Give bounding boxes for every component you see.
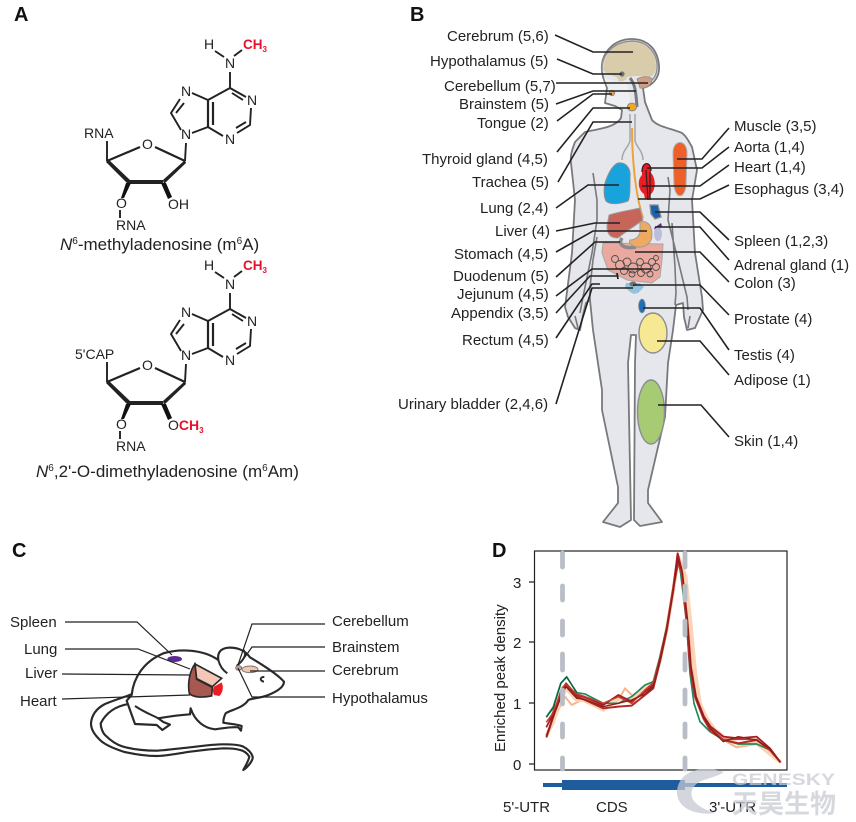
label: Cerebrum (mouse): Cerebrum (332, 662, 399, 679)
label: Liver (mouse): Liver (25, 665, 58, 682)
mouse cerebellum (236, 666, 242, 670)
caption: N6,2'-O-dimethyladenosine: 6 (48, 463, 54, 474)
watermark: Genesky logo and text (677, 769, 836, 819)
gene region label: 5'-UTR: 5'-UTR (503, 799, 550, 816)
label: Thyroid gland (422, 108, 630, 168)
molecule: N6-methyladenosine structure: RNA (116, 217, 146, 233)
intestine (602, 243, 663, 283)
liver (607, 208, 643, 238)
molecule: N6,2'-O-dimethyladenosine structure: N (225, 352, 235, 368)
mouse liver (189, 664, 212, 697)
chart: enriched peak density (492, 551, 787, 774)
label: Stomach (454, 231, 647, 263)
molecule: N6,2'-O-dimethyladenosine structure: OCH (168, 417, 199, 433)
label: Heart: Heart (1,4) (734, 159, 806, 176)
label: Duodenum (453, 242, 620, 285)
label: Lung (mouse): Lung (24, 641, 57, 658)
hypothalamus (619, 71, 625, 77)
label: Urinary bladder: Urinary bladder (2,4,6) (398, 396, 548, 413)
label: Stomach: Stomach (4,5) (454, 246, 548, 263)
arm and torso contours (575, 173, 690, 328)
mouse spleen (167, 656, 182, 662)
watermark text Chinese: 天昊生物 (732, 789, 836, 819)
label: Spleen (mouse) (10, 614, 172, 655)
label: Cerebrum (447, 28, 633, 52)
aorta (642, 164, 651, 200)
lung (604, 163, 630, 204)
label: Testis (643, 308, 795, 364)
human body diagram (565, 39, 703, 527)
molecule: N6-methyladenosine structure (84, 36, 268, 233)
label: Spleen: Spleen (1,2,3) (734, 233, 828, 250)
molecule: N6-methyladenosine structure: N (181, 83, 191, 99)
caption: N6,2'-O-dimethyladenosine: N (36, 462, 49, 481)
label: Aorta: Aorta (1,4) (734, 139, 805, 156)
brainstem (630, 78, 637, 107)
esophagus (632, 128, 643, 218)
label: Rectum: Rectum (4,5) (462, 332, 549, 349)
mouse cerebrum (242, 666, 258, 673)
y axis ticks and numbers: 2 (513, 635, 521, 652)
molecule: N6-methyladenosine structure: H (204, 36, 214, 52)
label: Cerebellum (mouse): Cerebellum (332, 613, 409, 630)
mouse tail (91, 694, 253, 770)
molecule: N6-methyladenosine structure: CH (243, 37, 262, 52)
molecule: N6-methyladenosine structure: RNA (84, 125, 114, 141)
label: Prostate (633, 285, 812, 328)
muscle (673, 142, 687, 196)
label: Hypothalamus (mouse) (238, 668, 428, 707)
spleen (650, 205, 661, 219)
molecule: N6,2'-O-dimethyladenosine structure: 3 (199, 426, 204, 435)
caption: N6,2'-O-dimethyladenosine: Am) (268, 462, 299, 481)
adrenal gland (654, 223, 662, 230)
molecule: N6,2'-O-dimethyladenosine structure: N (181, 304, 191, 320)
molecule: N6-methyladenosine structure: N (247, 92, 257, 108)
panel letter A: A (14, 4, 28, 26)
y axis ticks and numbers (513, 575, 534, 774)
mouse heart (213, 682, 223, 696)
label: Aorta (647, 139, 805, 168)
caption: N6-methyladenosine: -methyladenosine (m (78, 235, 237, 254)
label: Brainstem (459, 91, 636, 113)
cerebrum (603, 41, 656, 81)
prostate (630, 282, 636, 286)
caption: N6-methyladenosine: 6 (237, 236, 243, 247)
y axis ticks and numbers: 0 (513, 757, 521, 774)
skin (638, 380, 664, 444)
label: Skin (658, 405, 798, 450)
label: Brainstem: Brainstem (5) (459, 96, 549, 113)
molecule: N6-methyladenosine structure: O (116, 195, 127, 211)
label: Liver: Liver (4) (495, 223, 550, 240)
curves (547, 553, 780, 762)
label: Urinary bladder (398, 288, 633, 413)
molecule: N6,2'-O-dimethyladenosine structure: H (204, 257, 214, 273)
label: Tongue: Tongue (2) (477, 115, 549, 132)
label: Duodenum: Duodenum (5) (453, 268, 549, 285)
stomach (629, 222, 652, 247)
molecule: N6,2'-O-dimethyladenosine structure: RNA (116, 438, 146, 454)
label: Heart (642, 159, 806, 186)
appendix (617, 273, 618, 279)
label: Cerebrum: Cerebrum (5,6) (447, 28, 549, 45)
molecule: N6,2'-O-dimethyladenosine structure: 3 (262, 266, 268, 275)
label: Trachea (472, 122, 632, 191)
label: Rectum (462, 284, 600, 349)
panel letter C: C (12, 540, 26, 562)
label: Liver (495, 223, 620, 240)
label: Adrenal gland: Adrenal gland (1) (734, 257, 849, 274)
dashed boundary lines (562, 553, 685, 769)
y axis ticks and numbers: 1 (513, 696, 521, 713)
label: Brainstem (mouse): Brainstem (332, 639, 400, 656)
label: Hypothalamus (430, 53, 622, 74)
molecule: N6,2'-O-dimethyladenosine structure: O (142, 357, 153, 373)
caption: N6-methyladenosine: A) (242, 235, 259, 254)
label: Thyroid gland: Thyroid gland (4,5) (422, 151, 548, 168)
watermark text GENESKY: GENESKY (732, 770, 836, 789)
caption: N6,2'-O-dimethyladenosine: ,2'-O-dimethyladenosine (m (54, 462, 262, 481)
label: Jejunum: Jejunum (4,5) (457, 286, 549, 303)
caption: N6-methyladenosine: 6 (72, 236, 78, 247)
label: Lung (mouse) (24, 641, 190, 669)
label: Spleen (mouse): Spleen (10, 614, 57, 631)
molecule: N6,2'-O-dimethyladenosine structure: O (116, 416, 127, 432)
molecule: N6-methyladenosine structure: OH (168, 196, 189, 212)
hind leg and ear folds (135, 650, 245, 718)
body silhouette (565, 39, 703, 527)
label: Skin: Skin (1,4) (734, 433, 798, 450)
label: Adipose (657, 341, 811, 389)
skull ring (602, 41, 657, 80)
tongue (609, 90, 615, 96)
gene region label: CDS: CDS (596, 799, 628, 816)
molecule: N6,2'-O-dimethyladenosine structure: N (247, 313, 257, 329)
gene region label: 3'-UTR: 3'-UTR (709, 799, 756, 816)
heart (639, 164, 655, 199)
label: Adrenal gland (655, 227, 849, 274)
panel letter B: B (410, 4, 424, 26)
label: Spleen (655, 212, 828, 250)
testis (639, 299, 645, 313)
molecule: N6,2'-O-dimethyladenosine structure: N (225, 276, 235, 292)
label: Esophagus (638, 181, 844, 199)
molecule: N6,2'-O-dimethyladenosine structure (75, 257, 268, 454)
gene model bar (543, 780, 787, 790)
duodenum (621, 238, 636, 248)
label: Heart (mouse): Heart (20, 693, 58, 710)
label: Testis: Testis (4) (734, 347, 795, 364)
label: Colon (635, 252, 796, 292)
label: Appendix: Appendix (3,5) (451, 305, 549, 322)
thyroid gland (627, 103, 637, 111)
molecule: N6-methyladenosine structure: O (142, 136, 153, 152)
label: Cerebellum: Cerebellum (5,7) (444, 78, 556, 95)
label: Jejunum (457, 269, 652, 303)
mouse diagram (91, 648, 284, 770)
caption: N6,2'-O-dimethyladenosine: 6 (262, 463, 268, 474)
molecule: N6-methyladenosine structure: N (181, 126, 191, 142)
label: Lung: Lung (2,4) (480, 200, 548, 217)
molecule: N6,2'-O-dimethyladenosine structure: CH (243, 258, 262, 273)
molecule: N6,2'-O-dimethyladenosine structure: N (181, 347, 191, 363)
mouse lung (195, 664, 222, 687)
label: Prostate: Prostate (4) (734, 311, 812, 328)
label: Esophagus: Esophagus (3,4) (734, 181, 844, 198)
label: Cerebellum (mouse) (238, 613, 409, 665)
trachea (622, 114, 643, 160)
label: Hypothalamus (mouse): Hypothalamus (332, 690, 428, 707)
mouse eye (261, 677, 264, 682)
kidney (654, 227, 662, 241)
label: Adipose: Adipose (1) (734, 372, 811, 389)
label: Muscle (677, 118, 817, 159)
molecule: N6-methyladenosine structure: N (225, 55, 235, 71)
label: Appendix (451, 276, 618, 322)
label: Muscle: Muscle (3,5) (734, 118, 817, 135)
caption: N6-methyladenosine: N (60, 235, 73, 254)
cerebellum (637, 77, 652, 88)
label: Heart (mouse) (20, 693, 190, 710)
molecule: N6-methyladenosine structure: N (225, 131, 235, 147)
molecule: N6-methyladenosine structure: 3 (262, 45, 268, 54)
label: Hypothalamus: Hypothalamus (5) (430, 53, 548, 70)
jejunum loops (612, 256, 660, 277)
molecule: N6,2'-O-dimethyladenosine structure: 5'CAP (75, 346, 114, 362)
label: Brainstem (mouse) (245, 639, 400, 657)
label: Lung (480, 185, 619, 217)
adipose (639, 313, 667, 353)
face interior (604, 78, 630, 107)
mouse outline (127, 648, 284, 731)
urinary bladder (625, 283, 644, 294)
label: Tongue (477, 94, 612, 132)
label: Colon: Colon (3) (734, 275, 796, 292)
y axis ticks and numbers: 3 (513, 575, 521, 592)
watermark logo swoosh (677, 769, 724, 814)
plot frame (534, 551, 787, 770)
label: Trachea: Trachea (5) (472, 174, 549, 191)
y axis title: Enriched peak density (492, 604, 509, 752)
panel letter D: D (492, 540, 506, 562)
